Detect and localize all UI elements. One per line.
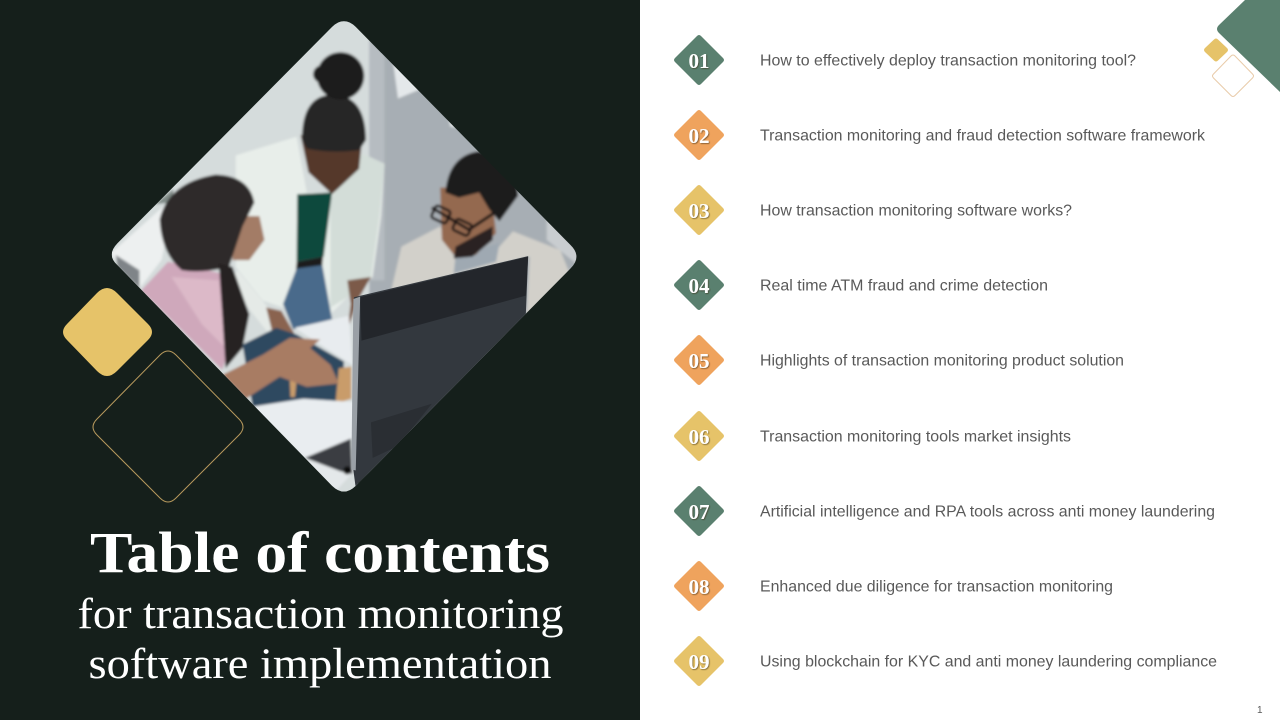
badge 03: [674, 185, 724, 235]
left woman hair: [160, 175, 254, 271]
item 02: [674, 110, 1206, 160]
jacket: [236, 137, 384, 314]
face: [301, 135, 363, 194]
badge 04: 04: [688, 274, 710, 298]
label 04: Real time ATM fraud and crime detection: [760, 278, 1048, 294]
page number: 1: [1257, 705, 1263, 716]
label 03: How transaction monitoring software works?: [760, 202, 1072, 220]
belt: [296, 257, 323, 270]
badge 05: [674, 335, 724, 385]
badge 07: [674, 486, 724, 536]
left woman jacket: [141, 262, 229, 370]
subheading line one: for transaction monitoring: [78, 591, 564, 638]
contents list: [674, 35, 1217, 686]
decoration: top-right outline diamond: [1212, 55, 1254, 96]
left woman face: [232, 216, 264, 260]
decoration: top-right yellow diamond: [1204, 38, 1228, 62]
label 09: Using blockchain for KYC and anti money laundering compliance: [760, 654, 1217, 670]
label 06: Transaction monitoring tools market insights: [760, 428, 1071, 446]
badge 06: 06: [688, 425, 710, 449]
green top: [297, 193, 332, 262]
right man hair: [445, 151, 518, 221]
item 09: [674, 636, 1217, 686]
label 07: Artificial intelligence and RPA tools across anti money laundering: [760, 504, 1215, 520]
diamond: solid yellow accent: [63, 288, 152, 376]
badge 07: 07: [688, 500, 710, 524]
right man face: [440, 187, 496, 257]
decoration: top-right green diamond: [1217, 0, 1280, 92]
badge 01: 01: [688, 49, 710, 73]
jeans: [283, 265, 332, 329]
item 05: [674, 335, 1124, 385]
badge 08: 08: [688, 575, 710, 599]
item 08: [674, 561, 1113, 611]
badge 02: [674, 110, 724, 160]
badge 02: 02: [688, 124, 710, 148]
badge 09: 09: [688, 650, 710, 674]
item 07: [674, 486, 1215, 536]
item 03: [674, 185, 1072, 235]
left woman arm and hand: [222, 338, 339, 399]
panel: dark left background: [0, 0, 640, 720]
monitor: [353, 256, 528, 486]
sleeve arm: [234, 272, 272, 332]
title: [78, 520, 564, 688]
seated lap: [243, 328, 344, 407]
badge 04: [674, 260, 724, 310]
item 01: [674, 35, 1136, 85]
diamond: gold outline accent: [93, 351, 243, 502]
label 01: How to effectively deploy transaction monitoring tool?: [760, 52, 1136, 70]
badge 01: [674, 35, 724, 85]
label 02: Transaction monitoring and fraud detection software framework: [760, 128, 1206, 144]
keyboard: [305, 439, 352, 474]
item 06: [674, 411, 1071, 461]
badge 08: [674, 561, 724, 611]
table papers: [249, 399, 356, 460]
badge 03: 03: [688, 199, 710, 223]
badge 06: [674, 411, 724, 461]
panel: white right background: [640, 0, 1280, 720]
paper: [295, 316, 352, 365]
badge 05: 05: [688, 349, 710, 373]
badge 09: [674, 636, 724, 686]
label 08: Enhanced due diligence for transaction monitoring: [760, 578, 1113, 596]
heading: Table of contents: Table of contents: [90, 520, 550, 585]
glasses: [432, 208, 494, 230]
subheading line two: software implementation: [88, 641, 552, 688]
hair bun: [317, 52, 364, 100]
item 04: [674, 260, 1048, 310]
label 05: Highlights of transaction monitoring product solution: [760, 352, 1124, 370]
right man jacket: [391, 226, 571, 318]
photo: team reviewing documents in diamond frame: [112, 21, 576, 492]
monitor lower edge fade: [358, 473, 368, 484]
head hair: [302, 94, 366, 152]
